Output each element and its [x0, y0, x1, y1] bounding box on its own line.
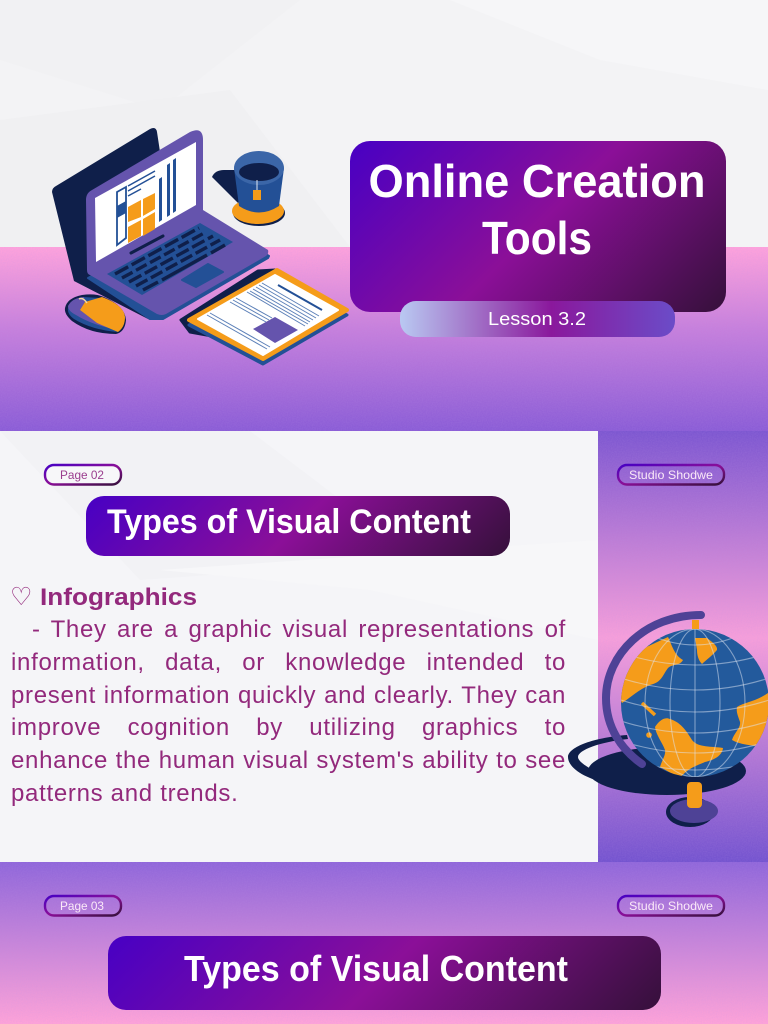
background: middle section — [0, 431, 768, 862]
body text: infographics description: information, data, or knowledge intended to — [11, 649, 566, 676]
body text: infographics description: enhance the human visual system's ability to see — [11, 747, 566, 774]
body text: infographics description: present information quickly and clearly. They can — [11, 682, 566, 709]
keyboard keys — [115, 228, 225, 290]
heading banner: types of visual content (page 03): Types of Visual Content — [184, 948, 568, 989]
heading banner: types of visual content (page 02): Types of Visual Content — [107, 503, 471, 541]
tag: page 02: Page 02 — [60, 468, 104, 482]
meridians and parallels — [621, 629, 768, 777]
body text: infographics description: - They are a graphic visual representations of — [32, 616, 566, 643]
subheading: infographics: ♡ — [10, 582, 32, 611]
illustration: mouse — [65, 294, 126, 334]
heading banner: types of visual content (page 02) — [86, 496, 510, 556]
subheading: infographics: Infographics — [40, 584, 197, 611]
title panel — [350, 141, 726, 312]
background: top section — [0, 0, 768, 431]
tag: page 02 — [45, 465, 121, 484]
tag: studio shodwe (bottom): Studio Shodwe — [629, 899, 713, 913]
body text: infographics description: patterns and trends. — [11, 780, 238, 807]
illustration: tablet — [181, 270, 347, 364]
laptop screen content — [117, 158, 176, 245]
lesson pill — [400, 301, 675, 337]
background: bottom section — [0, 862, 768, 1024]
illustration: globe — [568, 615, 768, 827]
globe stand shadow — [568, 735, 746, 795]
tag: page 03: Page 03 — [60, 899, 104, 913]
tag: studio shodwe (side): Studio Shodwe — [629, 468, 713, 482]
body text: infographics description: improve cognition by utilizing graphics to — [11, 714, 566, 741]
lesson pill: Lesson 3.2 — [488, 309, 586, 329]
title text line 2: Tools — [482, 212, 592, 264]
tag: page 03 — [45, 896, 121, 916]
illustration: mug on coaster — [212, 151, 285, 226]
tag: studio shodwe (side) — [618, 465, 724, 484]
continents — [610, 637, 768, 778]
body text: infographics description — [11, 616, 566, 807]
heading banner: types of visual content (page 03) — [108, 936, 661, 1010]
tag: studio shodwe (bottom) — [618, 896, 724, 916]
illustration: laptop — [52, 128, 269, 320]
title text line 1: Online Creation — [368, 155, 706, 207]
